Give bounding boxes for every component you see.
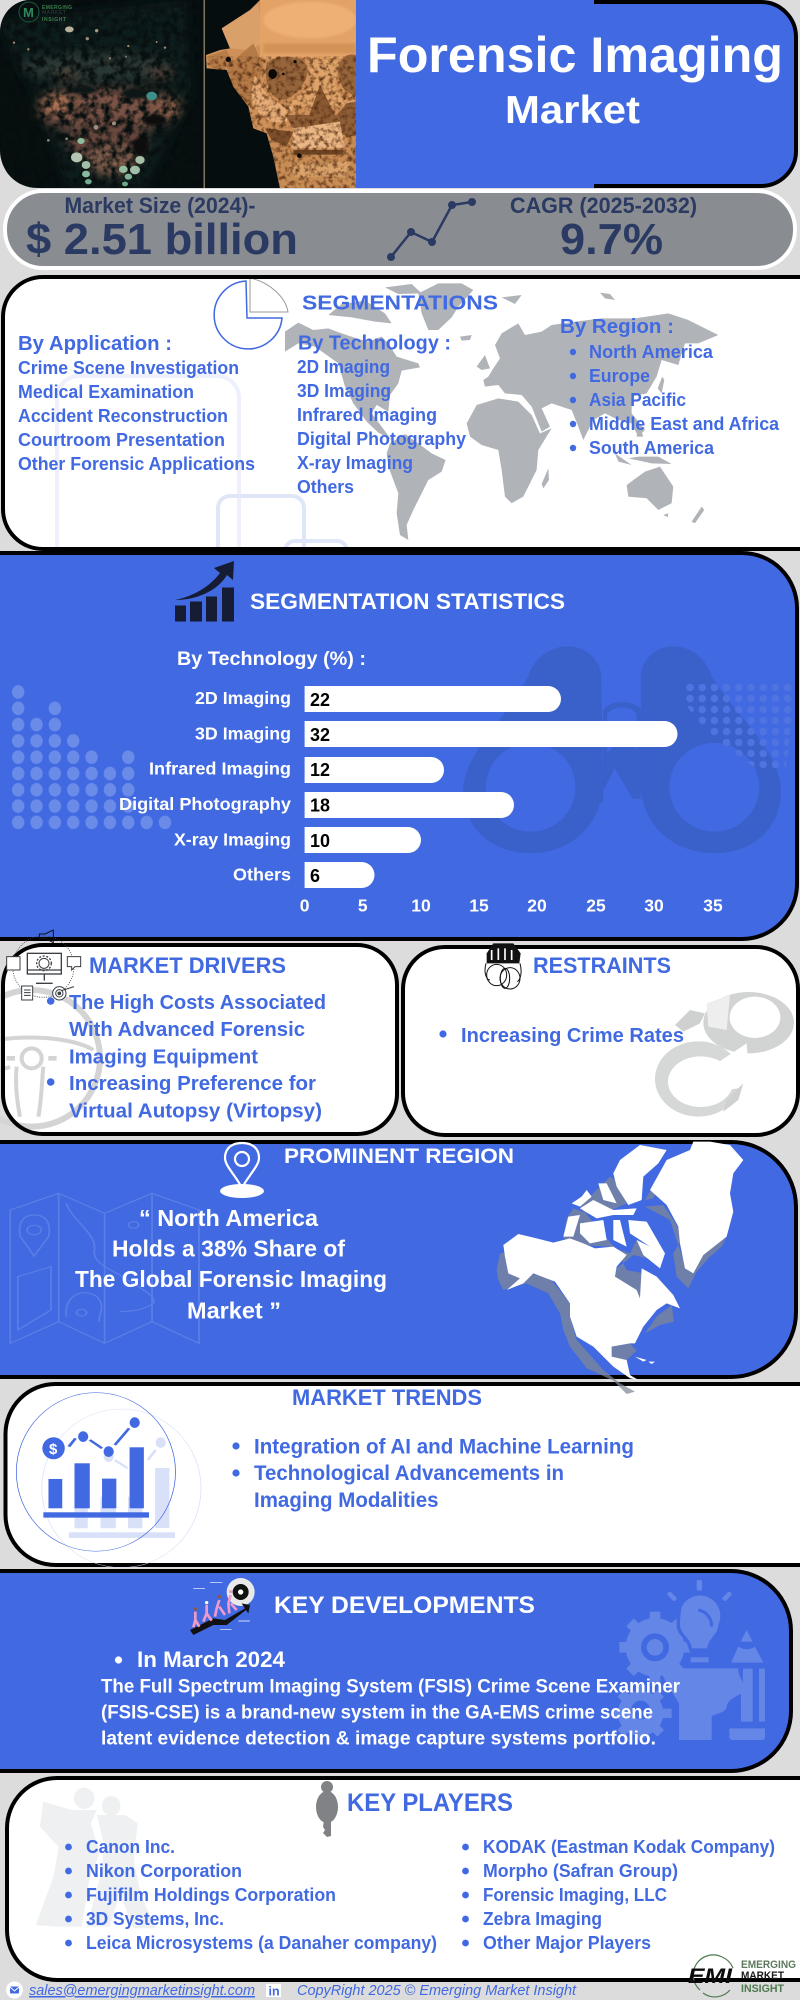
column: by application: By Application : bbox=[18, 333, 172, 355]
bar values: 12 bbox=[310, 760, 330, 780]
subheading: by technology percent: By Technology (%) : bbox=[177, 648, 366, 670]
column: by technology: Infrared Imaging bbox=[297, 405, 437, 425]
faint duplicate chart bbox=[69, 1437, 175, 1538]
driver list: Virtual Autopsy (Virtopsy) bbox=[69, 1100, 322, 1122]
decorative steering wheel bbox=[0, 990, 100, 1127]
decorative dots, right bbox=[684, 682, 796, 768]
column: by region: Europe bbox=[589, 366, 650, 386]
heading: key players: KEY PLAYERS bbox=[347, 1789, 513, 1817]
development description: latent evidence detection & image capture systems portfolio. bbox=[101, 1728, 656, 1750]
bar values bbox=[310, 690, 330, 886]
heading: segmentation statistics: SEGMENTATION STATISTICS bbox=[250, 589, 565, 614]
header image: forensic CT scans bbox=[0, 0, 360, 190]
restraint item: Increasing Crime Rates bbox=[461, 1025, 684, 1047]
x axis labels: 35 bbox=[703, 896, 723, 916]
trends list: Integration of AI and Machine Learning bbox=[254, 1436, 634, 1458]
x axis labels: 10 bbox=[411, 896, 431, 916]
footer bbox=[6, 1955, 796, 1999]
category labels: Digital Photography bbox=[119, 794, 291, 814]
panel: market drivers bbox=[0, 930, 397, 1134]
bar values: 18 bbox=[310, 796, 330, 816]
column: by technology: X-ray Imaging bbox=[297, 453, 413, 473]
bar values: 10 bbox=[310, 831, 330, 851]
players list, left: Nikon Corporation bbox=[86, 1860, 242, 1881]
column: by application bbox=[18, 333, 255, 474]
development description: (FSIS-CSE) is a brand-new system in the GA-EMS crime scene bbox=[101, 1702, 653, 1724]
title: Forensic Imaging bbox=[367, 27, 783, 83]
x axis labels: 25 bbox=[586, 896, 606, 916]
quote: North America share: Market ” bbox=[187, 1298, 281, 1324]
panel: prominent region bbox=[0, 1142, 796, 1394]
decorative binoculars bbox=[463, 646, 781, 853]
column: by application: Medical Examination bbox=[18, 382, 194, 402]
development date: In March 2024 bbox=[137, 1647, 286, 1672]
column: by region: Middle East and Africa bbox=[589, 414, 780, 434]
heading: segmentations: SEGMENTATIONS bbox=[302, 292, 498, 314]
category labels: Infrared Imaging bbox=[149, 758, 291, 778]
bar values: 32 bbox=[310, 725, 330, 745]
players list, right: KODAK (Eastman Kodak Company) bbox=[483, 1836, 775, 1857]
market size and CAGR panel bbox=[5, 191, 795, 268]
3D skull scan, right bbox=[200, 0, 360, 190]
quote: North America share: “ North America bbox=[139, 1205, 318, 1231]
players list, left: Fujifilm Holdings Corporation bbox=[86, 1884, 336, 1905]
icon: finance chart in circle bbox=[16, 1393, 201, 1568]
icon: monitor with marketing symbols bbox=[7, 930, 81, 1000]
title panel background bbox=[300, 0, 796, 188]
small brand logo on image: MARKET bbox=[42, 10, 66, 16]
divider between scans bbox=[204, 0, 205, 188]
driver list bbox=[47, 992, 326, 1122]
quote: North America share bbox=[75, 1205, 387, 1324]
small brand logo on image bbox=[19, 2, 72, 23]
development description: The Full Spectrum Imaging System (FSIS) Crime Scene Examiner bbox=[101, 1676, 681, 1698]
panel: market trends bbox=[6, 1384, 800, 1568]
icon: team climbing arrow to target bbox=[190, 1578, 255, 1635]
column: by technology: By Technology : bbox=[298, 332, 451, 354]
small brand logo on image: EMERGING bbox=[42, 5, 72, 11]
column: by application: Crime Scene Investigation bbox=[18, 358, 239, 378]
heading: market trends: MARKET TRENDS bbox=[292, 1385, 482, 1410]
category labels bbox=[119, 688, 291, 884]
trends list: Imaging Modalities bbox=[254, 1489, 438, 1512]
players list, right bbox=[462, 1836, 775, 1953]
panel: key players bbox=[7, 1778, 800, 1980]
small brand logo on image: INSIGHT bbox=[42, 17, 66, 23]
decorative folded map bbox=[10, 1193, 199, 1343]
panel: segmentations bbox=[3, 277, 800, 596]
icon: linkedin: in bbox=[268, 1984, 280, 1998]
column: by technology: Digital Photography bbox=[297, 429, 466, 449]
column: by application: Other Forensic Applications bbox=[18, 454, 255, 474]
players list, left: 3D Systems, Inc. bbox=[86, 1908, 224, 1929]
decorative gears, bulb and pencil bbox=[613, 1580, 765, 1740]
column: by technology bbox=[297, 332, 466, 497]
players list, left bbox=[65, 1836, 437, 1953]
icon: pie chart bbox=[214, 278, 288, 349]
icon: handcuffs and fist bbox=[485, 943, 521, 989]
x axis labels: 0 bbox=[300, 896, 310, 916]
icon: growth bars with arrow bbox=[175, 561, 234, 622]
bars bbox=[305, 686, 678, 888]
decorative handcuffs bbox=[655, 992, 794, 1117]
logo: Emerging Market Insight: INSIGHT bbox=[741, 1983, 784, 1995]
header panel bbox=[0, 0, 796, 190]
CAGR value: 9.7% bbox=[560, 215, 663, 264]
logo: Emerging Market Insight: MARKET bbox=[741, 1970, 784, 1982]
map: North America bbox=[497, 1142, 743, 1394]
CAGR label: CAGR (2025-2032) bbox=[510, 193, 697, 218]
category labels: 3D Imaging bbox=[195, 724, 291, 744]
map shadow bbox=[497, 1175, 727, 1394]
icon: map pin bbox=[220, 1143, 264, 1198]
column: by region: By Region : bbox=[560, 316, 674, 338]
column: by technology: 3D Imaging bbox=[297, 381, 391, 401]
x axis labels: 30 bbox=[644, 896, 664, 916]
column: by technology: 2D Imaging bbox=[297, 357, 390, 377]
world map bbox=[285, 283, 718, 540]
driver list: Increasing Preference for bbox=[69, 1073, 316, 1095]
driver list: The High Costs Associated bbox=[69, 992, 326, 1014]
column: by application: Accident Reconstruction bbox=[18, 406, 228, 426]
x axis labels: 20 bbox=[527, 896, 547, 916]
players list, right: Zebra Imaging bbox=[483, 1908, 602, 1929]
heading: market drivers: MARKET DRIVERS bbox=[89, 953, 286, 978]
players list, left: Leica Microsystems (a Danaher company) bbox=[86, 1932, 437, 1953]
email address: sales@emergingmarketinsight.com bbox=[29, 1982, 255, 1999]
bar values: 22 bbox=[310, 690, 330, 710]
logo: Emerging Market Insight bbox=[688, 1955, 796, 1997]
column: by technology: Others bbox=[297, 477, 354, 497]
column: by region: Asia Pacific bbox=[589, 390, 686, 410]
copyright: CopyRight 2025 © Emerging Market Insight bbox=[297, 1982, 577, 1999]
players list, right: Forensic Imaging, LLC bbox=[483, 1884, 667, 1905]
players list, right: Other Major Players bbox=[483, 1932, 651, 1953]
decorative dots, left bbox=[9, 684, 174, 831]
panel: key developments bbox=[0, 1571, 791, 1771]
heading: key developments: KEY DEVELOPMENTS bbox=[274, 1592, 535, 1619]
decorative faint rounded frames bbox=[57, 376, 347, 596]
players list, left: Canon Inc. bbox=[86, 1836, 175, 1857]
category labels: X-ray Imaging bbox=[174, 830, 291, 850]
small brand logo on image: M bbox=[23, 5, 34, 20]
logo: Emerging Market Insight: EMI bbox=[688, 1965, 733, 1988]
players list, right: Morpho (Safran Group) bbox=[483, 1860, 678, 1881]
bar values: 6 bbox=[310, 866, 320, 886]
x axis labels: 5 bbox=[358, 896, 368, 916]
scan of head, left bbox=[0, 0, 200, 188]
development description bbox=[101, 1676, 681, 1750]
driver list: Imaging Equipment bbox=[69, 1046, 258, 1068]
dollar symbol: $ bbox=[49, 1441, 58, 1458]
quote: North America share: Holds a 38% Share of bbox=[112, 1236, 345, 1262]
icon: email bbox=[6, 1982, 23, 1998]
subtitle: Market bbox=[505, 89, 640, 132]
heading: restraints: RESTRAINTS bbox=[533, 953, 671, 978]
column: by region: South America bbox=[589, 438, 715, 458]
icon: rising line chart bbox=[388, 198, 476, 260]
trends list bbox=[232, 1436, 634, 1512]
panel: segmentation statistics bbox=[0, 553, 797, 939]
category labels: 2D Imaging bbox=[195, 688, 291, 708]
panel: restraints bbox=[403, 943, 798, 1135]
driver list: With Advanced Forensic bbox=[69, 1019, 305, 1041]
logo: Emerging Market Insight: EMERGING bbox=[741, 1959, 796, 1971]
column: by region bbox=[560, 316, 780, 458]
decorative silhouettes of two people bbox=[36, 1788, 156, 1928]
x axis labels: 15 bbox=[469, 896, 489, 916]
heading: prominent region: PROMINENT REGION bbox=[284, 1144, 514, 1168]
trends list: Technological Advancements in bbox=[254, 1462, 564, 1485]
column: by region: North America bbox=[589, 342, 714, 362]
x axis labels bbox=[300, 896, 723, 916]
column: by application: Courtroom Presentation bbox=[18, 430, 225, 450]
quote: North America share: The Global Forensic Imaging bbox=[75, 1266, 387, 1292]
category labels: Others bbox=[233, 864, 291, 884]
icon: key bbox=[316, 1781, 338, 1837]
market size value: $ 2.51 billion bbox=[26, 215, 298, 264]
market size label: Market Size (2024)- bbox=[64, 193, 256, 218]
bar chart bbox=[119, 686, 723, 916]
